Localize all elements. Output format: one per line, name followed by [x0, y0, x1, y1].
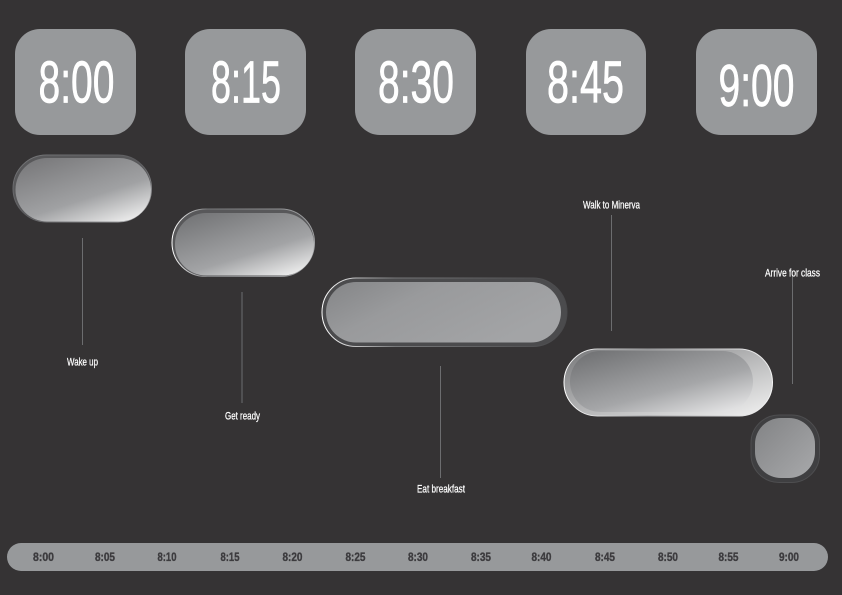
label: arrive for class: Arrive for class	[765, 268, 820, 280]
connector line: walk to Minerva	[610, 215, 612, 331]
timeline axis: 8:45	[595, 550, 615, 564]
label: wake up: Wake up	[67, 356, 98, 368]
timeline axis: 8:05	[95, 550, 115, 564]
connector line: eat breakfast	[440, 366, 442, 478]
activity bar: get ready	[172, 209, 314, 276]
timeline axis: 8:20	[282, 550, 303, 564]
label: walk to Minerva: Walk to Minerva	[583, 200, 641, 212]
timeline axis: 8:00	[33, 550, 54, 564]
timeline axis: 8:15	[220, 550, 240, 564]
timeline axis: 8:50	[658, 550, 678, 564]
label: get ready: Get ready	[225, 410, 260, 422]
time card 8:30	[355, 29, 476, 135]
activity bar: walk to Minerva	[564, 349, 772, 416]
connector line: arrive for class	[792, 275, 794, 384]
connector line: get ready	[241, 292, 243, 403]
activity bar: eat breakfast	[322, 278, 567, 346]
time card 8:15	[185, 29, 306, 135]
label: eat breakfast: Eat breakfast	[417, 484, 465, 496]
timeline axis: 9:00	[779, 550, 799, 564]
time card 8:45: 8:45	[547, 50, 624, 116]
time card 8:00: 8:00	[38, 50, 114, 116]
activity block: arrive for class	[751, 415, 820, 482]
time card 8:45	[526, 29, 646, 135]
timeline axis: 8:40	[532, 550, 552, 564]
connector line: wake up	[82, 238, 84, 345]
time card 9:00	[696, 29, 817, 135]
timeline axis: 8:10	[158, 550, 177, 564]
timeline axis: 8:25	[346, 550, 366, 564]
time card 8:30: 8:30	[378, 50, 454, 116]
timeline axis: 8:55	[718, 550, 739, 564]
time card 8:00	[15, 29, 136, 135]
timeline axis	[7, 543, 828, 571]
time card 9:00: 9:00	[718, 53, 794, 119]
timeline axis: 8:35	[471, 550, 491, 564]
time card 8:15: 8:15	[211, 50, 281, 116]
activity bar: wake up	[13, 155, 152, 222]
timeline axis: 8:30	[408, 550, 428, 564]
